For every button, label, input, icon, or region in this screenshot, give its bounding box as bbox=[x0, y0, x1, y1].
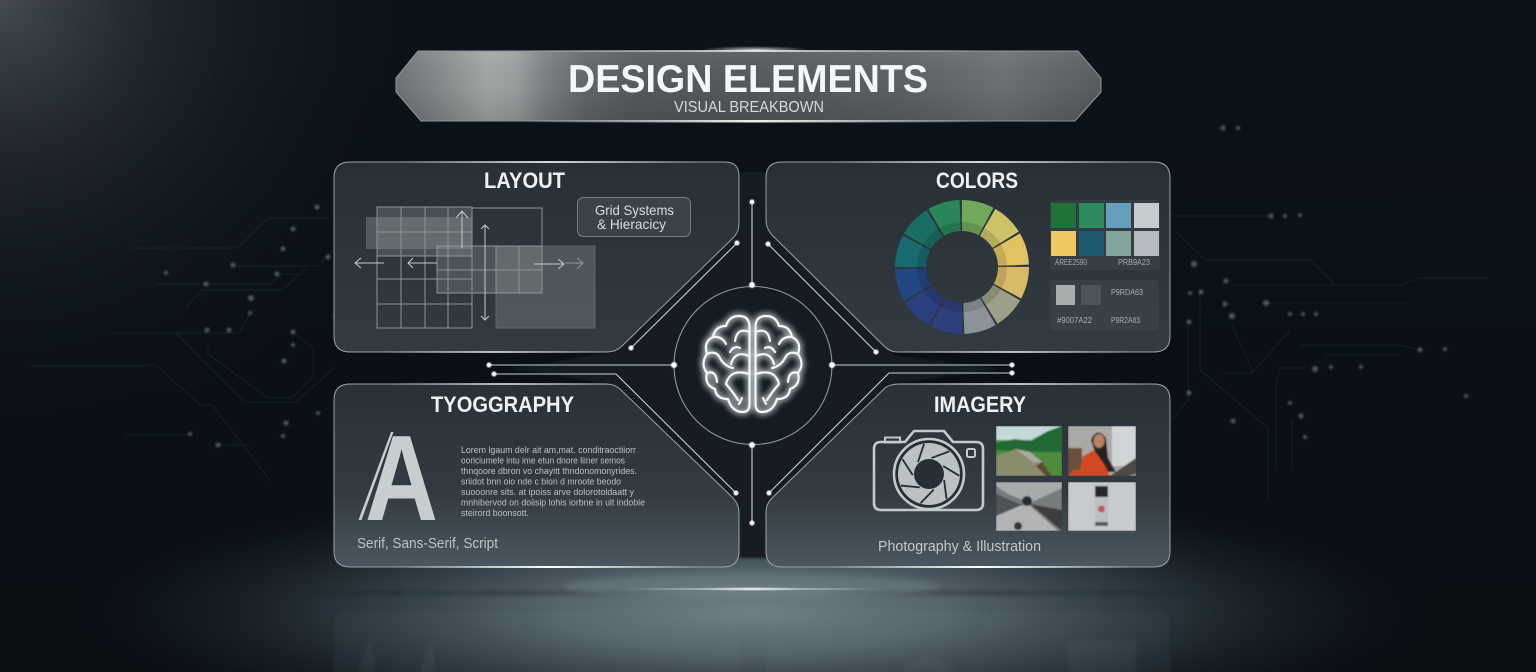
color swatches: AREE2590 bbox=[1055, 257, 1087, 267]
heading: typography: TYOGGRAPHY bbox=[431, 392, 574, 417]
neutral swatches: P9R2A83 bbox=[1111, 315, 1140, 325]
heading: layout: LAYOUT bbox=[484, 168, 566, 193]
floor reflection of panels bbox=[334, 612, 1170, 672]
neutral swatches: P9RDA63 bbox=[1111, 287, 1143, 297]
arrows bbox=[355, 211, 583, 320]
heading: imagery: IMAGERY bbox=[934, 392, 1026, 417]
callout: grid systems bbox=[578, 198, 690, 236]
background circuit traces right bbox=[1170, 216, 1490, 500]
color wheel bbox=[892, 197, 1032, 337]
title text: DESIGN ELEMENTS bbox=[568, 58, 928, 101]
central circle bbox=[674, 286, 832, 444]
neutral swatches bbox=[1050, 280, 1159, 330]
title banner bbox=[396, 46, 1101, 122]
panel: colors bbox=[766, 161, 1170, 353]
icon: brain bbox=[704, 316, 802, 412]
body text sample: suooonre sits. at ipoiss arve dolorotoldaatt y bbox=[461, 487, 634, 498]
photo: black and white road bbox=[996, 482, 1062, 531]
body text sample: steirord boonsott. bbox=[461, 508, 529, 519]
icon: camera bbox=[874, 431, 983, 510]
neutral swatches: #9007A22 bbox=[1057, 315, 1092, 325]
callout: grid systems: Grid Systems bbox=[595, 202, 674, 218]
letter specimen: A bbox=[365, 410, 438, 546]
grid diagram bbox=[355, 207, 595, 328]
background circuit traces left bbox=[30, 218, 334, 480]
panel: layout bbox=[334, 161, 739, 353]
body text sample: ooriciumele intu ime etun dnore liiner semos bbox=[461, 456, 625, 466]
body text sample bbox=[461, 445, 645, 519]
color swatches: PRB9A23 bbox=[1118, 257, 1150, 267]
panel: imagery bbox=[766, 383, 1170, 568]
subtitle: VISUAL BREAKBOWN bbox=[674, 99, 824, 116]
body text sample: Lorem lgaum delr ait am,mat. conditraoctiiorr bbox=[461, 445, 636, 456]
background circuit nodes left bbox=[164, 204, 338, 448]
photo: landscape bbox=[996, 426, 1062, 476]
floor light flare bbox=[562, 574, 942, 598]
caption: imagery: Photography & Illustration bbox=[878, 539, 1041, 555]
photo: product bottle bbox=[1068, 482, 1136, 531]
panel: typography bbox=[334, 383, 739, 568]
body text sample: thnqoore dbron vo chayitt thndonomonyrides. bbox=[461, 466, 637, 477]
caption: font types: Serif, Sans-Serif, Script bbox=[357, 536, 498, 552]
background circuit nodes right bbox=[1186, 126, 1468, 439]
heading: colors: COLORS bbox=[936, 168, 1018, 193]
connector lines and nodes bbox=[486, 200, 1014, 526]
callout: grid systems: & Hieracicy bbox=[597, 216, 666, 232]
body text sample: mnhibervod on doiisip lohis iorbne in ult indoble bbox=[461, 498, 645, 508]
body text sample: sriidot bnn oio nde c bion d mroote beodo bbox=[461, 476, 621, 488]
photo: portrait bbox=[1068, 426, 1136, 476]
central channel backdrop bbox=[510, 172, 1000, 558]
color swatches bbox=[1050, 200, 1160, 270]
